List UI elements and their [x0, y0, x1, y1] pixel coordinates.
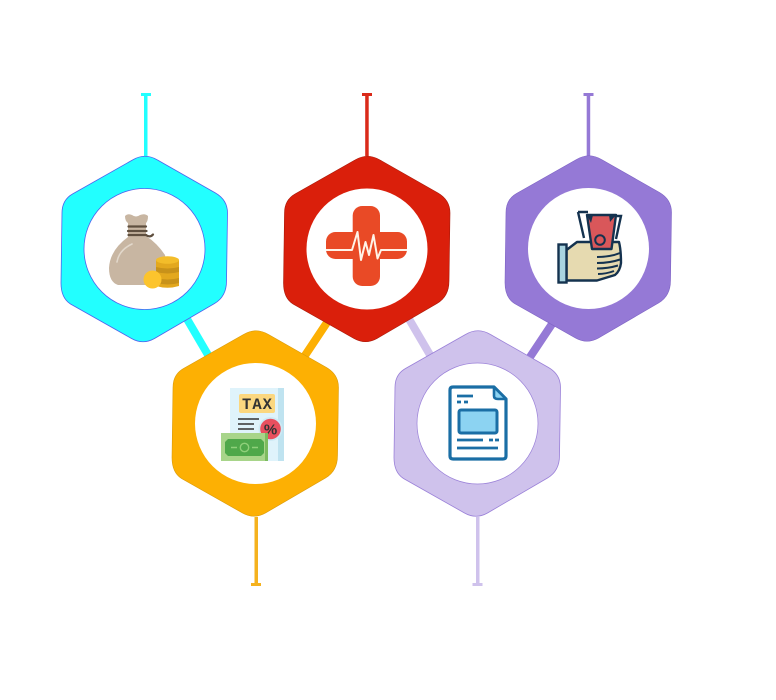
hexagon: cyan [61, 156, 228, 342]
stem: orange [251, 517, 261, 586]
hexagon: light purple [394, 331, 560, 516]
icon: money bag with coins [109, 214, 179, 288]
icon: medical cross with heartbeat [326, 206, 407, 286]
hexagon: red [284, 156, 450, 342]
stem: red [362, 93, 372, 156]
hexagon: purple [505, 156, 672, 341]
connector: red to light purple [409, 319, 433, 360]
hexagon: orange [172, 331, 338, 516]
icon: tax document with cash [221, 388, 284, 461]
stem: light purple [472, 517, 482, 586]
icon: hand holding money [558, 212, 621, 282]
connector: purple to light purple [528, 321, 554, 360]
icon: document [450, 387, 506, 459]
connector: cyan to orange [187, 319, 211, 360]
label: percent: % [264, 422, 277, 438]
connector: red to orange [302, 321, 328, 360]
stem: purple [584, 93, 594, 156]
label: TAX: TAX [242, 396, 273, 414]
stem: cyan [141, 93, 151, 156]
